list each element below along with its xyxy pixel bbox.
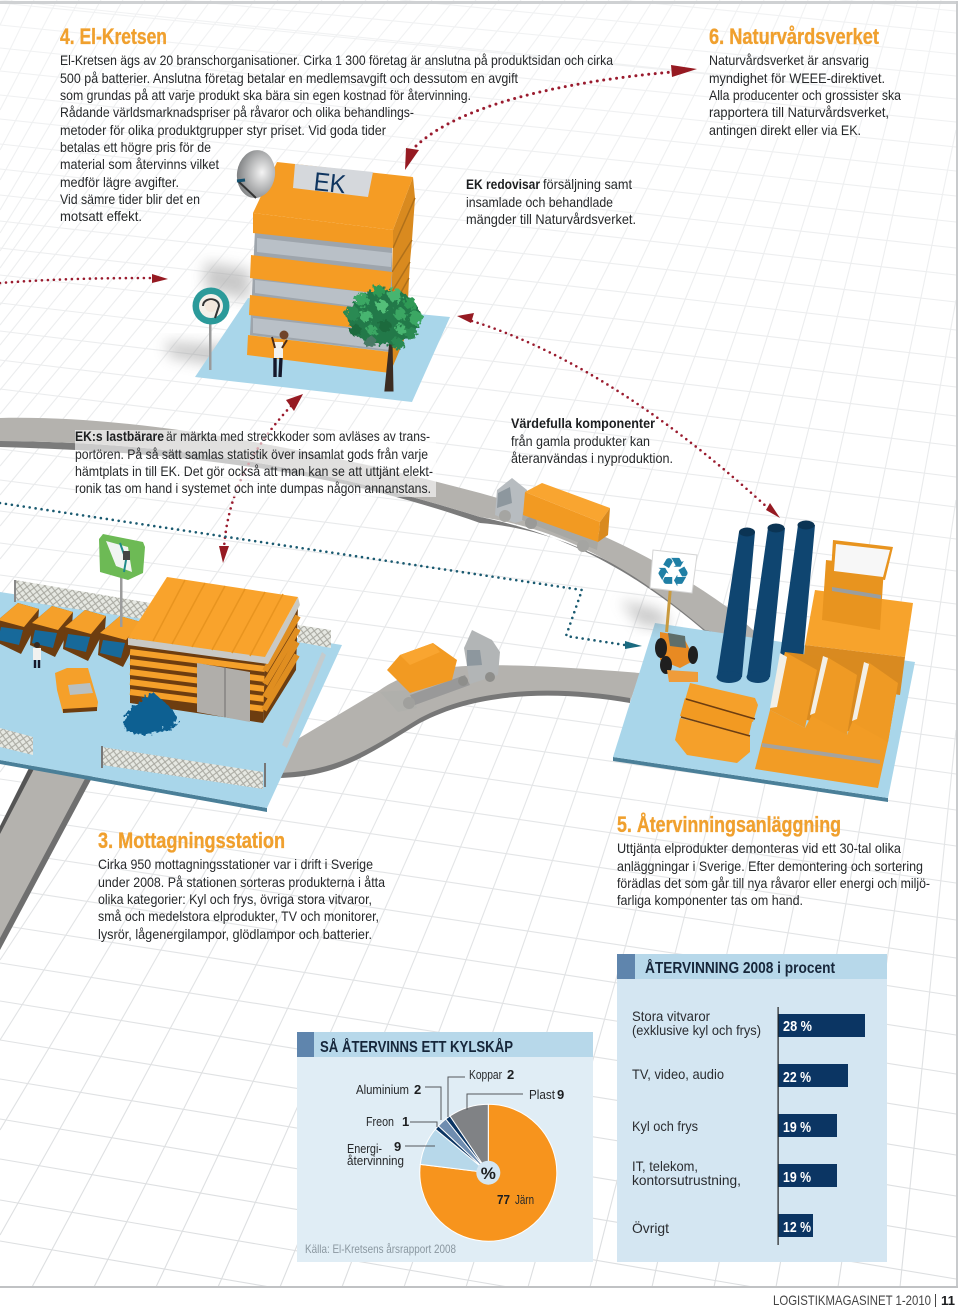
pie labels: 9 xyxy=(394,1139,401,1154)
text block: El-Kretsen xyxy=(60,52,613,224)
text block: Mottagningsstation: Cirka 950 mottagningsstationer var i drift i Sverige xyxy=(98,856,373,872)
pie centre xyxy=(476,1161,500,1185)
text block: Mottagningsstation xyxy=(98,856,385,942)
pie labels: 2 xyxy=(414,1082,421,1097)
text block: Återvinningsanläggning xyxy=(617,840,930,908)
pie labels: 9 xyxy=(557,1087,564,1102)
text block: EK:s lastbärare: EK:s lastbärare xyxy=(75,428,164,444)
bars: 22 % xyxy=(783,1069,811,1086)
text block: El-Kretsen: El-Kretsen ägs av 20 branschorganisationer. Cirka 1 300 företag är anslutna på produktsidan och cirka xyxy=(60,52,613,68)
category labels: Stora vitvaror xyxy=(632,1008,710,1024)
arrow: EK to collection station xyxy=(219,394,303,563)
pie labels: 77 xyxy=(497,1192,510,1207)
text block: EK redovisar: försäljning samt xyxy=(543,176,632,192)
pie labels xyxy=(347,1067,564,1207)
building base plate xyxy=(195,298,450,402)
text block: El-Kretsen: Rådande världsmarknadspriser på råvaror och olika behandlings- xyxy=(60,104,414,120)
recycling station building xyxy=(128,577,300,723)
text block: EK:s lastbärare: är märkta med streckkoder som avläses av trans- xyxy=(166,428,430,444)
wheel loader xyxy=(655,632,698,682)
text block: Naturvårdsverket: Naturvårdsverket är ansvarig xyxy=(709,52,869,68)
text block: El-Kretsen: material som återvinns vilket xyxy=(60,156,219,172)
text block: Naturvårdsverket: Alla producenter och grossister ska xyxy=(709,87,901,103)
arrow: dotted teal transport route xyxy=(0,503,642,649)
text block: Mottagningsstation: små och medelstora elprodukter, TV och monitorer, xyxy=(98,908,379,924)
text block: Återvinningsanläggning: anläggningar i Sverige. Efter demontering och sortering xyxy=(617,858,923,874)
person xyxy=(272,330,288,377)
pie labels: Aluminium xyxy=(356,1082,409,1097)
bars: 19 % xyxy=(783,1169,811,1186)
text block: Mottagningsstation: olika kategorier: Kyl och frys, övriga stora vitvaror, xyxy=(98,891,372,907)
heading: 5. Återvinningsanläggning: 5. Återvinningsanläggning xyxy=(617,811,841,837)
text block: Naturvårdsverket xyxy=(709,52,901,138)
text block: Återvinningsanläggning: farliga komponenter tas om hand. xyxy=(617,892,803,908)
material pile xyxy=(123,692,178,735)
satellite dish xyxy=(234,148,278,200)
green station sign xyxy=(99,534,145,627)
text block: EK:s lastbärare: portören. På så sätt samlas statistik över insamlat gods från varje xyxy=(75,446,428,462)
front fences xyxy=(0,652,326,789)
illustration: El-Kretsen building xyxy=(165,148,450,402)
arrow: incoming to El-Kretsen xyxy=(0,274,168,283)
recycling sign: ♻ xyxy=(655,550,691,596)
chimneys xyxy=(716,520,815,683)
text block: Mottagningsstation: lysrör, lågenergilampor, glödlampor och batterier. xyxy=(98,926,372,942)
illustration: collection station xyxy=(0,534,342,812)
recycling sign xyxy=(620,550,697,632)
text block: EK redovisar: EK redovisar xyxy=(466,176,540,192)
EK sign: EK xyxy=(312,166,348,199)
text block: EK redovisar xyxy=(466,176,636,227)
car xyxy=(55,668,98,713)
back fence xyxy=(14,580,331,648)
arrow: EK to Naturvårdsverket xyxy=(405,65,697,170)
leader lines xyxy=(405,1077,523,1146)
text block: EK:s lastbärare xyxy=(75,428,436,497)
skips xyxy=(675,683,758,763)
panel: bar chart Återvinning 2008 xyxy=(617,954,887,1262)
pie labels: återvinning xyxy=(347,1153,404,1168)
text block: Naturvårdsverket: rapportera till Naturvårdsverket, xyxy=(709,104,889,120)
bars xyxy=(778,1007,865,1245)
text block: Naturvårdsverket: antingen direkt eller via EK. xyxy=(709,122,861,138)
worker xyxy=(33,642,41,668)
category labels: Övrigt xyxy=(632,1219,669,1236)
text block: El-Kretsen: betalas ett högre pris för de xyxy=(60,139,211,155)
text block: Återvinningsanläggning: Uttjänta elprodukter demonteras vid ett 30-tal olika xyxy=(617,840,901,856)
pie labels: Freon xyxy=(366,1114,394,1129)
illustration: truck on lower road xyxy=(380,630,500,712)
heading: 6. Naturvårdsverket: 6. Naturvårdsverket xyxy=(709,24,880,49)
EK sign xyxy=(293,164,373,199)
text block: El-Kretsen: medför lägre avgifter. xyxy=(60,174,179,190)
text block: Värdefulla komponenter: från gamla produkter kan xyxy=(511,433,650,449)
illustration: recycling plant xyxy=(613,520,915,802)
chart title: SÅ ÅTERVINNS ETT KYLSKÅP xyxy=(320,1037,513,1056)
text block: Naturvårdsverket: myndighet för WEEE-direktivet. xyxy=(709,70,885,86)
footer: magazine name and page number: 11 xyxy=(941,1293,955,1308)
pie labels: Koppar xyxy=(469,1067,503,1082)
text block: Värdefulla komponenter xyxy=(511,415,673,466)
source: Källa: El-Kretsens årsrapport 2008 xyxy=(305,1242,456,1256)
text block: Värdefulla komponenter: återanvändas i nyproduktion. xyxy=(511,450,673,466)
pie labels: Järn xyxy=(515,1192,534,1207)
factory block xyxy=(802,540,913,695)
text block: EK redovisar: mängder till Naturvårdsverket. xyxy=(466,211,636,227)
text block: EK:s lastbärare: ronik tas om hand i systemet och inte dumpas någon annanstans. xyxy=(75,480,431,496)
containers xyxy=(0,603,141,667)
pie labels: 2 xyxy=(507,1067,514,1082)
pie labels: Energi- xyxy=(347,1141,382,1156)
bars: 12 % xyxy=(783,1219,811,1236)
category labels xyxy=(632,1008,761,1236)
pie centre: % xyxy=(481,1164,496,1183)
text block: El-Kretsen: som grundas på att varje produkt ska bära sin egen kostnad för återvinning. xyxy=(60,87,471,103)
pie xyxy=(420,1104,557,1241)
arrow: EK to factory xyxy=(457,313,780,518)
road: lower transport route xyxy=(278,665,640,778)
heading: 4. El-Kretsen: 4. El-Kretsen xyxy=(60,24,167,49)
text block: Mottagningsstation: under 2008. På stationen sorteras produkterna i åtta xyxy=(98,874,385,890)
text block: Värdefulla komponenter: Värdefulla komponenter xyxy=(511,415,655,431)
category labels: kontorsutrustning, xyxy=(632,1172,741,1188)
road: upper transport route xyxy=(0,418,770,645)
sawtooth hall xyxy=(755,652,898,788)
call-centre sign xyxy=(192,288,230,370)
bars: 19 % xyxy=(783,1119,811,1136)
panel: pie chart Så återvinns ett kylskåp xyxy=(297,1032,593,1262)
building body xyxy=(247,162,415,373)
bars: 28 % xyxy=(783,1018,812,1035)
heading: 3. Mottagningsstation: 3. Mottagningsstation xyxy=(98,828,285,853)
pie labels: 1 xyxy=(402,1114,409,1129)
text block: El-Kretsen: motsatt effekt. xyxy=(60,208,142,224)
category labels: TV, video, audio xyxy=(632,1066,724,1082)
text block: El-Kretsen: Vid sämre tider blir det en xyxy=(60,191,200,207)
text block: EK:s lastbärare: hämtplats in till EK. Det gör också att man kan se att uttjänt elekt- xyxy=(75,463,433,479)
station base plate xyxy=(0,592,342,812)
tree xyxy=(345,285,423,390)
text block: El-Kretsen: 500 på batterier. Anslutna företag betalar en medlemsavgift och dessutom en avgift xyxy=(60,70,518,86)
category labels: IT, telekom, xyxy=(632,1158,698,1174)
text block: EK redovisar: insamlade och behandlade xyxy=(466,194,613,210)
pie labels: Plast xyxy=(529,1087,555,1102)
category labels: (exklusive kyl och frys) xyxy=(632,1022,761,1038)
chart title: ÅTERVINNING 2008 i procent xyxy=(645,958,836,977)
text block: El-Kretsen: metoder för olika produktgrupper styr priset. Vid goda tider xyxy=(60,122,386,138)
illustration: truck on upper road xyxy=(495,478,610,552)
road: exit bottom left xyxy=(0,764,94,950)
plant base plate xyxy=(613,623,915,802)
category labels: Kyl och frys xyxy=(632,1118,698,1134)
